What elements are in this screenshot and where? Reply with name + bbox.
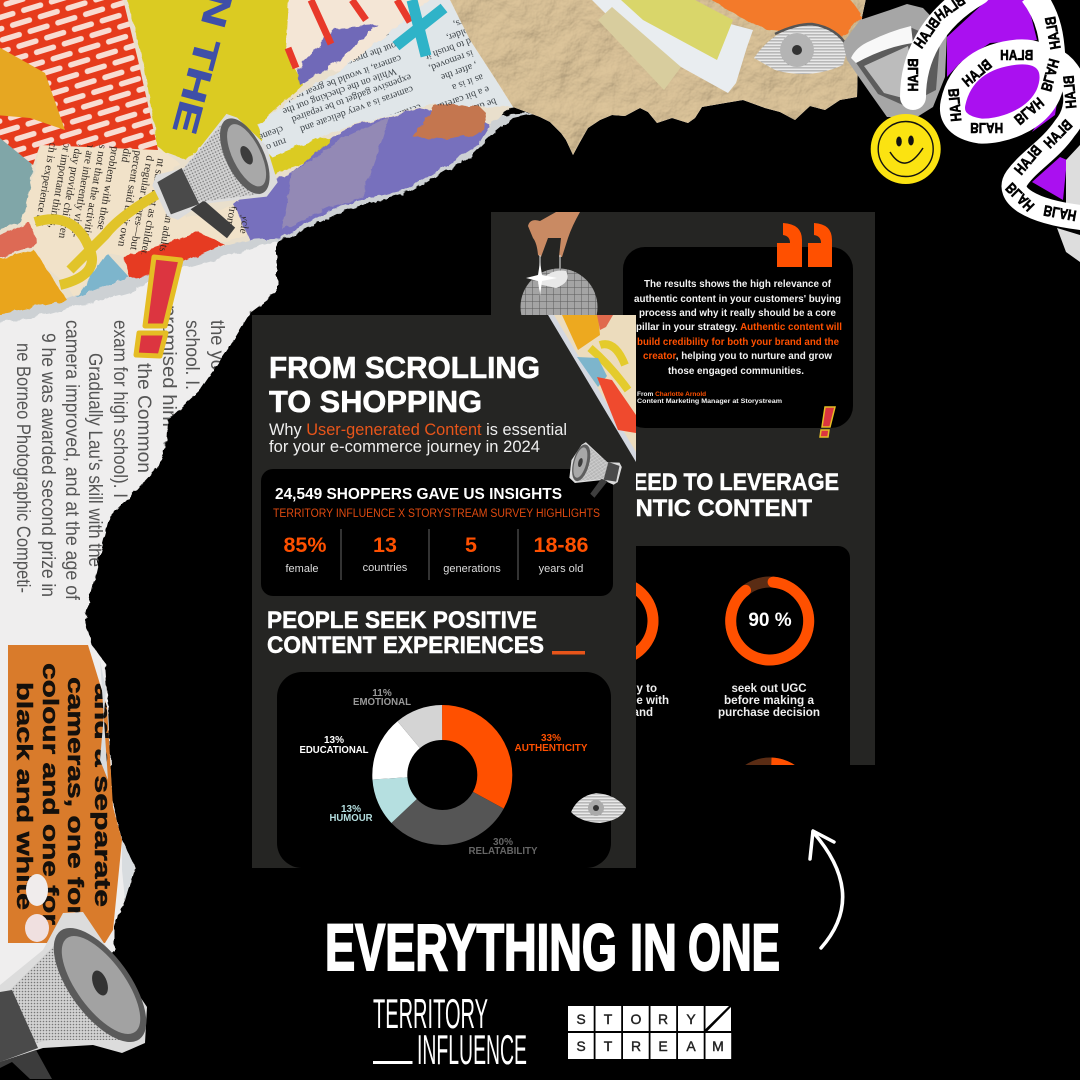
purple scrap on stripes (297, 25, 378, 85)
grey newspaper scrap (258, 0, 513, 157)
ribbon words (905, 0, 1080, 224)
stat values: 13 (373, 533, 397, 557)
newspaper column text: n are inherently virtu- (68, 141, 97, 239)
chart: lower ring (746, 758, 795, 765)
water photo scrap (0, 115, 35, 236)
quote attribution: From Charlotte Arnold (637, 391, 706, 398)
grey scrap text: , after the (439, 59, 479, 83)
quote text: pillar in your strategy. Authentic content will (636, 322, 842, 333)
quote text: authentic content in your customers' buying (634, 294, 841, 305)
headline: ONE (688, 910, 780, 984)
grey scrap text: cleaner th (244, 123, 285, 147)
icon: megaphone bottom-left (0, 912, 164, 1079)
stat values: 18-86 (534, 533, 589, 557)
panel: front infographic page (252, 315, 640, 868)
label: emotional: 11% (372, 688, 392, 699)
quote panel (623, 247, 853, 428)
newspaper column text: 's not that the activities (80, 141, 109, 243)
quote text: process and why it really should be a core (639, 308, 836, 319)
ribbon words: BLAH (970, 119, 1003, 136)
newspaper text, rotated: Gradually Lau's skill with the (84, 353, 105, 567)
newspaper column text: ch is experience tel (32, 141, 59, 227)
newspaper column text: did (119, 147, 133, 164)
headline: IN (630, 910, 677, 984)
logo: Storystream: A (686, 1038, 696, 1054)
grey scrap text: While on the checking out the (280, 65, 398, 117)
section heading (267, 607, 544, 659)
panel: donut chart (277, 672, 611, 868)
kraft paper with tape (440, 0, 870, 155)
grey scrap text: certain field, as the scutter in most (290, 101, 423, 159)
newspaper column text: nt said that as children (138, 157, 167, 258)
stat labels: years old (539, 563, 583, 575)
newspaper text, rotated: promised him (158, 305, 179, 427)
logo: Territory Influence (373, 990, 527, 1073)
red stripes (288, 0, 410, 68)
orange scrap (0, 45, 65, 130)
stat caption: purchase decision (718, 707, 820, 719)
newspaper text, rotated: the Common (133, 363, 154, 473)
text: INFLUENCE (417, 1026, 527, 1073)
stat labels: countries (363, 562, 408, 574)
quote text: The results shows the high relevance of (644, 279, 832, 290)
stat labels: generations (443, 563, 501, 575)
label: authenticity: 33% (541, 733, 561, 744)
grey scrap text: run on to (250, 135, 288, 158)
orange page with bold rotated text: colour and one for (38, 663, 63, 926)
icon: small exclamation mark (820, 407, 835, 437)
quote text: build credibility for both your brand and the (637, 337, 839, 348)
blah speech ribbons (905, 0, 1080, 262)
label: authenticity (514, 733, 588, 754)
left stat caption: a brand and (588, 707, 653, 719)
newspaper text, rotated: camera improved, and at the age of (61, 320, 82, 601)
subtitle: Why User-generated Content is essential (269, 420, 567, 439)
newspaper column text: d regular chores—but (127, 154, 156, 251)
grey scrap text: camera, it would be great to check (270, 52, 403, 110)
quote attribution (637, 391, 782, 405)
ribbon words: BLAH (1037, 57, 1062, 93)
headline: EVERYTHING (325, 910, 617, 984)
label: relatability: RELATABILITY (468, 846, 538, 857)
ribbon words: BLAH (959, 56, 995, 91)
teal tape X (396, 0, 444, 56)
orange page with bold rotated text: and a separate (90, 683, 115, 907)
label: emotional (353, 688, 411, 708)
logo: Storystream: Y (686, 1011, 696, 1027)
label: relatability (468, 837, 538, 857)
grey scrap text: as it is a (450, 71, 485, 93)
purple fills (947, 0, 1037, 77)
newspaper column text: y day provide children (56, 139, 85, 240)
grey scrap text: expensive gadget to be repaired (290, 71, 413, 125)
orange torn paper (695, 0, 862, 37)
newspaper column text (32, 139, 252, 258)
quote attribution: Content Marketing Manager at Storystream (637, 398, 782, 405)
torn edge band of the collage (0, 112, 540, 326)
logo: Storystream: T (604, 1038, 613, 1054)
ribbon words: BLAH (905, 58, 922, 92)
panel: survey stats (261, 469, 613, 596)
purple photo (234, 108, 490, 240)
logo: Storystream (568, 1006, 731, 1059)
stat caption: seek out UGC (732, 683, 806, 695)
logo: Territory Influence: TERRITORY (373, 990, 488, 1037)
orange page with bold rotated text: cameras, one for (63, 677, 88, 918)
salmon, orange and blue scraps (0, 223, 38, 264)
subtitle: for your e-commerce journey in 2024 (269, 437, 540, 456)
label: educational: 13% (324, 735, 344, 746)
grey scrap text: across the shutter (321, 27, 391, 61)
label: educational: EDUCATIONAL (300, 745, 368, 756)
stat values (283, 533, 589, 557)
newspaper column text: percent said their own (115, 149, 144, 248)
heading: NEED TO LEVERAGE (617, 469, 839, 496)
newspaper text, rotated: ne Borneo Photographic Competi- (12, 343, 33, 593)
stat value: 90 % (748, 610, 792, 631)
newspaper text, rotated (12, 305, 227, 601)
stat values: 5 (465, 533, 477, 557)
grey scrap text: is removed, (427, 47, 475, 73)
stats panel (636, 546, 850, 765)
left stat caption: engage with (603, 695, 669, 707)
yellow swirl (35, 190, 165, 285)
stat caption (718, 683, 820, 719)
label: relatability: 30% (493, 837, 513, 848)
orange page with bold rotated text: black and white (12, 682, 37, 910)
ribbon words: BLAH (1041, 117, 1076, 152)
ribbon words: BLAH (1003, 179, 1038, 214)
quote text: creator, helping you to nurture and grow (643, 351, 832, 362)
title: TO SHOPPING (269, 384, 482, 419)
ribbon words: BLAH (1011, 93, 1047, 128)
label: humour: HUMOUR (330, 813, 373, 824)
newspaper column text: ycle (237, 214, 252, 235)
ribbon words: BLAH (911, 15, 944, 52)
newspaper column text: American adults (156, 179, 181, 253)
grey scrap text: years, (452, 11, 478, 30)
section heading: CONTENT EXPERIENCES (267, 632, 544, 659)
heading (554, 469, 839, 522)
ribbon words: BLAH (1042, 15, 1065, 51)
newspaper scrap (21, 143, 252, 297)
section heading: PEOPLE SEEK POSITIVE (267, 607, 537, 634)
subtitle (269, 420, 567, 456)
survey subheading: TERRITORY INFLUENCE X STORYSTREAM SURVEY HIGHLIGHTS (273, 508, 600, 520)
quote text: those engaged communities. (668, 366, 804, 377)
striped cream sheet (286, 0, 448, 70)
ribbon words: BLAH (946, 88, 965, 122)
newspaper text, rotated: exam for high school). I (109, 320, 130, 498)
label: authenticity: AUTHENTICITY (514, 743, 588, 754)
grey scrap text: cameras is a very delicate and (299, 83, 415, 134)
label: humour (330, 804, 373, 824)
stat labels (285, 562, 583, 575)
panel: back infographic page (491, 212, 875, 765)
newspaper column text: or important things, (46, 141, 73, 230)
red perforated sheet (0, 0, 165, 170)
label: educational (300, 735, 368, 756)
collage: top-left torn paper scraps (0, 0, 513, 319)
grey scrap text: e a bit careful (435, 83, 491, 112)
chart: donut (390, 722, 495, 828)
icon: megaphone top-left (138, 104, 295, 258)
stat caption: before making a (724, 695, 815, 707)
chart: 90 percent ring (727, 579, 812, 663)
logo: Storystream: S (576, 1011, 586, 1027)
stat values: 85% (283, 533, 327, 557)
image: hand holding disco ball (520, 212, 598, 346)
grey scrap text (260, 20, 498, 156)
accent bar (552, 651, 585, 654)
newspaper column text: problem with these (94, 145, 121, 231)
ribbon words: BLAH (1000, 47, 1033, 64)
label: humour: 13% (341, 804, 361, 815)
newspaper text, rotated: 9 he was awarded second prize in (37, 333, 58, 597)
icon: smiley (871, 114, 941, 184)
logo: Storystream: O (631, 1011, 642, 1027)
logo: Storystream: R (658, 1011, 668, 1027)
left stat caption (636, 684, 668, 716)
icon: small eye (571, 793, 626, 823)
label: emotional: EMOTIONAL (353, 697, 411, 708)
chart: left ring (636, 582, 658, 660)
left stat caption: likely to (614, 683, 657, 695)
grey scrap text: out the pressure on the film to (281, 39, 398, 91)
stat labels: female (285, 563, 319, 575)
grey scrap text: d to brush it (424, 35, 473, 62)
icon: quotation marks (777, 223, 832, 267)
icon: small megaphone (564, 440, 626, 503)
newspaper column text: from (223, 204, 239, 228)
orange page with bold rotated text (8, 645, 135, 943)
logo: Storystream: E (658, 1038, 668, 1054)
title: FROM SCROLLING (269, 350, 540, 385)
survey heading: 24,549 SHOPPERS GAVE US INSIGHTS (275, 486, 562, 503)
quote text (634, 279, 842, 377)
title (269, 350, 540, 419)
grey scrap text: body. The (253, 149, 295, 173)
logo: Storystream: M (712, 1038, 724, 1054)
newspaper text, rotated: school. I. (181, 320, 202, 390)
torn paper: left newspaper page (0, 230, 277, 1010)
logo: Storystream: S (576, 1038, 586, 1054)
yellow sheet (122, 0, 336, 175)
newspaper text, rotated: the yo (206, 320, 227, 370)
logo: Storystream: T (604, 1011, 613, 1027)
mini torn collage corner (548, 315, 636, 462)
grey scrap text: holder, (445, 23, 475, 43)
icon: red exclamation mark (136, 257, 181, 356)
logo: Storystream: R (631, 1038, 641, 1054)
grey ear fragments (1066, 145, 1080, 205)
ribbon words: BLAH (1011, 142, 1046, 178)
icon: open mouth (843, 4, 947, 117)
icon: engraved eye (754, 24, 848, 74)
arrow (810, 831, 843, 948)
grey scrap text: be distracting (443, 95, 498, 124)
heading: AUTHENTIC CONTENT (554, 495, 812, 522)
